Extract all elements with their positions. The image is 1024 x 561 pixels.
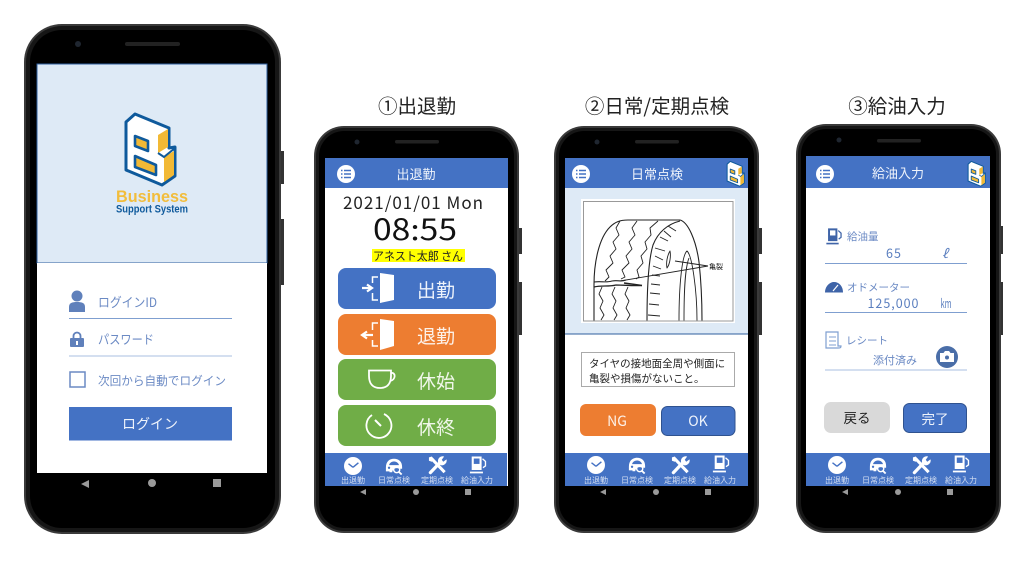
phone frame [24, 24, 284, 534]
time: 08:55 [373, 207, 457, 249]
bottom tab bar: 出退勤 [825, 475, 849, 486]
password field: パスワード [98, 329, 154, 348]
bottom tab bar [806, 453, 990, 486]
bottom tab bar: 日常点検 [621, 475, 653, 486]
bottom tab bar [565, 453, 748, 486]
phone: refuel screen [796, 124, 1003, 533]
bottom tab bar: 定期点検 [905, 475, 937, 486]
button: break end: 休終 [417, 413, 455, 440]
android nav buttons [600, 489, 711, 495]
bottom tab bar: 出退勤 [341, 475, 365, 486]
screen [565, 158, 748, 486]
icon: menu [337, 165, 355, 183]
button: done: 完了 [922, 408, 948, 428]
instruction text box [582, 352, 734, 386]
heading: inspection: ②日常/定期点検 [585, 90, 730, 119]
header bar [565, 158, 748, 188]
date: 2021/01/01 Mon [343, 189, 483, 214]
tire label: 亀裂 [709, 262, 723, 272]
phone frame [796, 124, 1003, 533]
android nav buttons [842, 489, 953, 495]
bottom tab bar: 出退勤 [584, 475, 608, 486]
phone: login screen [24, 24, 284, 534]
login button: ログイン [122, 414, 178, 434]
heading: refuel: ③給油入力 [848, 90, 946, 119]
heading: attendance: ①出退勤 [378, 90, 456, 119]
login form [37, 263, 267, 473]
bottom tab bar: 日常点検 [862, 475, 894, 486]
icon: lock [70, 333, 84, 347]
bottom tab bar [325, 453, 507, 486]
button: NG [580, 404, 656, 436]
field: odometer: オドメーター [847, 280, 910, 295]
bottom tab bar: 給油入力 [704, 475, 736, 486]
auto login checkbox: 次回から自動でログイン [98, 372, 226, 389]
button: clock out: 退勤 [417, 322, 455, 349]
phone frame [314, 126, 522, 533]
button: back: 戻る [844, 407, 870, 427]
icon: logo small [968, 161, 985, 186]
header title: 給油入力 [872, 163, 924, 182]
logo wordmark [116, 187, 188, 216]
phone: inspection screen [554, 126, 762, 533]
screen [806, 156, 990, 486]
phone frame [554, 126, 762, 533]
header bar [325, 158, 508, 188]
header bar [806, 156, 990, 188]
button: clock out [338, 314, 496, 355]
field: odometer: 125,000 [868, 293, 919, 312]
instruction text box: 亀裂や損傷がないこと。 [589, 371, 704, 386]
field: fuel amount [825, 228, 967, 264]
logo wordmark: Business [116, 187, 188, 206]
button: break start: 休始 [417, 367, 455, 394]
field: fuel amount: 65 [886, 243, 902, 262]
button: back [824, 402, 890, 433]
field: fuel amount: ℓ [942, 243, 950, 262]
screen [325, 158, 508, 486]
button: clock in [338, 268, 496, 309]
button: break end [338, 405, 496, 446]
login button [69, 407, 232, 440]
android nav buttons [360, 489, 471, 495]
button: OK: OK [688, 411, 708, 431]
login id field: ログインID [98, 292, 157, 311]
instruction text box: タイヤの接地面全周や側面に [589, 356, 725, 371]
button: NG: NG [607, 411, 627, 431]
phone: attendance screen [314, 126, 522, 533]
bottom tab bar: 給油入力 [945, 475, 977, 486]
field: receipt: 添付済み [873, 352, 917, 368]
bottom tab bar: 日常点検 [378, 475, 410, 486]
header title: 日常点検 [631, 164, 683, 183]
icon: logo [126, 114, 175, 185]
bottom tab bar: 定期点検 [421, 475, 453, 486]
header title: 出退勤 [396, 164, 436, 183]
bottom tab bar: 給油入力 [461, 475, 493, 486]
android nav buttons [81, 479, 221, 488]
button: done [904, 404, 966, 432]
icon: user [69, 290, 85, 312]
button: break start [338, 359, 496, 400]
field: fuel amount: 給油量 [847, 229, 879, 244]
icon: menu [572, 165, 590, 183]
field: odometer [825, 280, 967, 313]
icon: logo small [727, 161, 744, 186]
tire image panel [565, 188, 748, 334]
button: clock in: 出勤 [417, 276, 455, 303]
logo panel [37, 64, 267, 263]
logo wordmark: Support System [116, 204, 188, 216]
button: OK [662, 406, 735, 436]
icon: camera [936, 346, 958, 368]
field: receipt [825, 332, 967, 370]
bottom tab bar: 定期点検 [664, 475, 696, 486]
field: receipt: レシート [846, 333, 888, 348]
illustration: tire [594, 220, 708, 320]
field: odometer: km [940, 293, 952, 312]
user name: アネスト太郎 さん [373, 248, 463, 264]
icon: menu [816, 165, 834, 183]
